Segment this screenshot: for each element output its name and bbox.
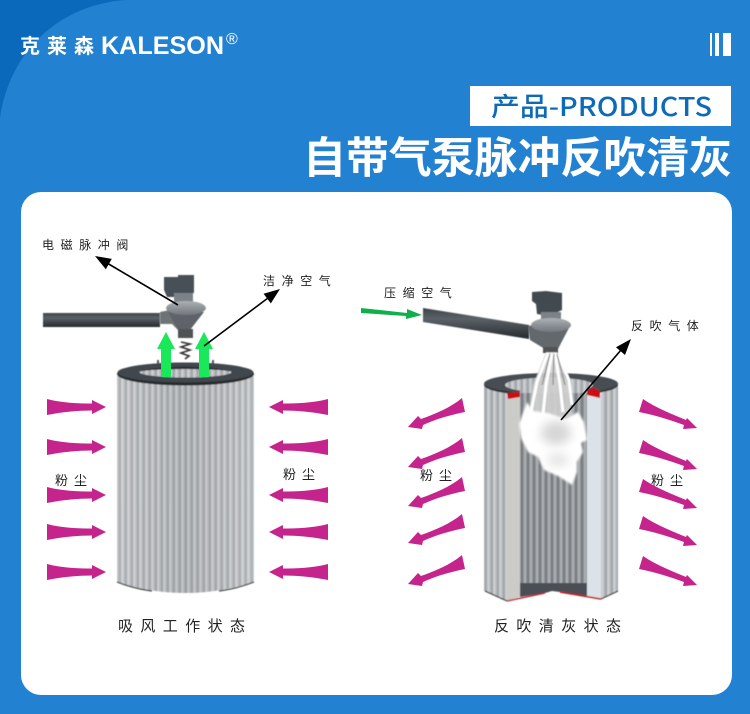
arrow to clean air label bbox=[204, 289, 280, 346]
pipe bbox=[43, 313, 160, 327]
label: dust left: 粉尘 bbox=[420, 468, 458, 483]
brand logo: KALESON bbox=[101, 32, 224, 60]
pulse valve bbox=[160, 275, 206, 359]
blown air spray bbox=[528, 352, 573, 420]
label: dust right: 粉尘 bbox=[651, 473, 689, 488]
icon: menu bars bbox=[710, 33, 731, 56]
dust arrows outward left bbox=[408, 398, 465, 586]
brand logo bbox=[20, 31, 238, 60]
green compressed air arrow bbox=[361, 308, 422, 319]
panel: white card bbox=[21, 192, 732, 695]
label: clean air: 洁净空气 bbox=[263, 273, 337, 288]
pulse valve, tilted bbox=[528, 291, 571, 353]
brand logo: ® bbox=[226, 31, 238, 48]
title: 自带气泵脉冲反吹清灰 bbox=[303, 135, 732, 183]
panel: reverse blow cleaning state bbox=[361, 285, 705, 635]
product tag: 产品-PRODUCTS bbox=[491, 87, 712, 124]
label: dust right: 粉尘 bbox=[283, 467, 321, 482]
caption: suction state: 吸风工作状态 bbox=[118, 618, 252, 635]
dust cloud bbox=[519, 402, 587, 485]
label: solenoid valve: 电磁脉冲阀 bbox=[42, 237, 135, 252]
label: blown air: 反吹气体 bbox=[631, 318, 705, 333]
filter cartridge, suction bbox=[117, 360, 254, 593]
pipe, tilted bbox=[423, 308, 529, 339]
arrow to blown air label bbox=[561, 339, 631, 420]
arrow to solenoid valve label bbox=[95, 256, 178, 305]
filter cartridge, cutaway bbox=[484, 373, 618, 601]
dust arrows right side bbox=[269, 399, 328, 580]
brand logo: 克莱森 bbox=[20, 35, 94, 58]
green arrow left bbox=[157, 332, 175, 377]
panel: suction working state bbox=[42, 237, 337, 635]
label: compressed air: 压缩空气 bbox=[384, 285, 458, 300]
dark corner curve bbox=[0, 0, 125, 118]
label: dust left: 粉尘 bbox=[55, 473, 93, 488]
caption: cleaning state: 反吹清灰状态 bbox=[494, 618, 628, 635]
green arrow right bbox=[195, 332, 213, 377]
dust arrows outward right bbox=[639, 399, 697, 586]
dust arrows left side bbox=[47, 399, 106, 580]
